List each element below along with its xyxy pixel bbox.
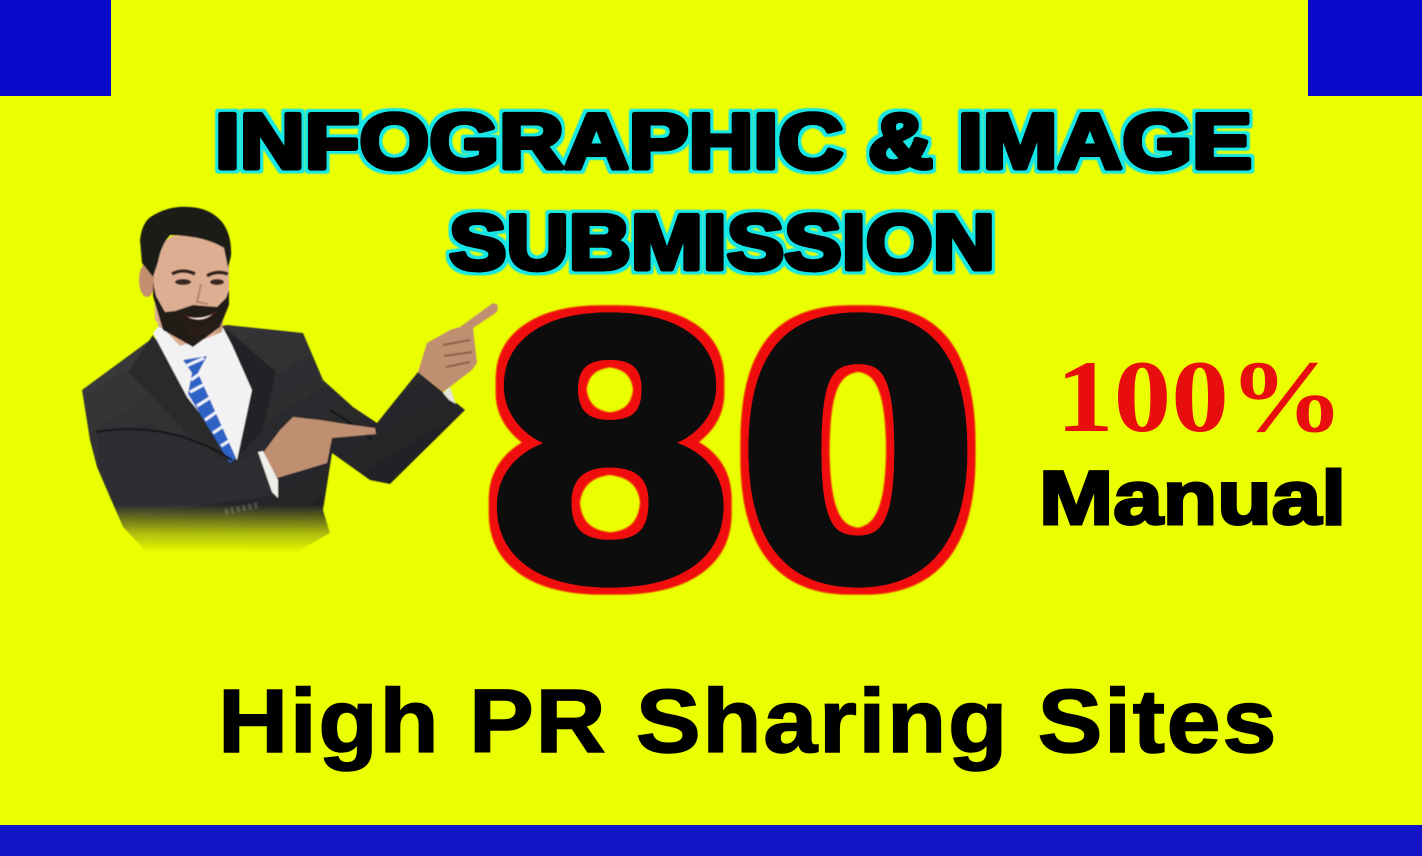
title line 2: SUBMISSION (449, 198, 995, 286)
left eye (175, 279, 191, 285)
jacket pocket buttons (225, 505, 258, 512)
big number 80: 80 (490, 242, 978, 657)
sleeve highlight (97, 425, 276, 520)
bottom blue bar (0, 825, 1422, 856)
footer heading: High PR Sharing Sites (218, 672, 1278, 772)
nose (197, 284, 208, 304)
title line 1: INFOGRAPHIC & IMAGE (215, 97, 1252, 185)
beard (153, 282, 229, 347)
right lapel (225, 328, 276, 455)
neck (158, 300, 225, 345)
100 percent label: 100% (1056, 340, 1344, 454)
title (215, 97, 1252, 286)
face (153, 234, 229, 346)
tie (183, 356, 236, 463)
hair (140, 207, 231, 277)
left lapel (128, 335, 235, 462)
manual label: Manual (1039, 456, 1346, 541)
upper hand finger lines (443, 340, 472, 367)
smile (182, 312, 216, 320)
illustration: businessman pointing (82, 207, 498, 562)
upper cuff (443, 387, 456, 404)
jacket fade (100, 505, 350, 553)
jacket (82, 325, 465, 556)
lower pointing hand (263, 417, 376, 478)
top left blue block (0, 0, 111, 96)
lower lip beard (184, 322, 213, 336)
eyebrows (172, 271, 228, 276)
shirt (153, 322, 252, 460)
top right blue block (1308, 0, 1422, 96)
fade cover (100, 552, 350, 562)
right eye (210, 279, 224, 285)
tie stripes (186, 358, 232, 446)
ear (139, 263, 155, 297)
lower cuff (258, 451, 278, 498)
upper pointing hand (418, 303, 498, 392)
sleeve seam (96, 410, 372, 460)
